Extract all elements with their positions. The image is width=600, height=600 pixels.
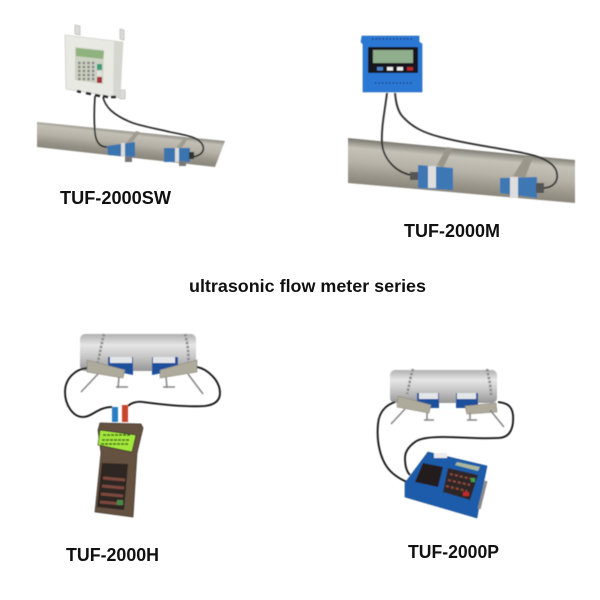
cables — [94, 96, 203, 157]
icon: handheld meter — [95, 423, 143, 517]
cables — [382, 93, 557, 188]
transducer right — [152, 357, 203, 394]
transducer right — [456, 393, 504, 427]
label: TUF-2000H: TUF-2000H — [66, 545, 159, 565]
transducer left — [107, 131, 140, 162]
pipe — [348, 138, 575, 203]
pipe — [80, 334, 196, 371]
panel: TUF-2000P — [378, 369, 513, 518]
straps — [97, 334, 188, 365]
panel: TUF-2000M — [348, 36, 575, 203]
cables — [378, 402, 513, 482]
label: TUF-2000M: TUF-2000M — [404, 221, 500, 241]
pipe — [37, 122, 225, 167]
panel: TUF-2000SW — [37, 25, 225, 167]
transducer left — [81, 357, 133, 392]
icon: DIN-rail meter — [361, 36, 422, 92]
panel: TUF-2000H — [65, 334, 220, 517]
icon: wall-mount meter — [65, 25, 125, 99]
icon: portable meter — [405, 452, 487, 518]
transducer left — [410, 147, 453, 190]
straps — [407, 369, 491, 396]
transducer right — [164, 138, 194, 166]
pipe — [390, 370, 497, 403]
transducer left — [391, 393, 439, 424]
transducer right — [500, 157, 544, 198]
label: TUF-2000P: TUF-2000P — [408, 542, 499, 562]
cables — [65, 367, 220, 417]
probes — [112, 405, 128, 422]
heading: ultrasonic flow meter series — [189, 276, 426, 296]
label: TUF-2000SW: TUF-2000SW — [60, 188, 171, 208]
